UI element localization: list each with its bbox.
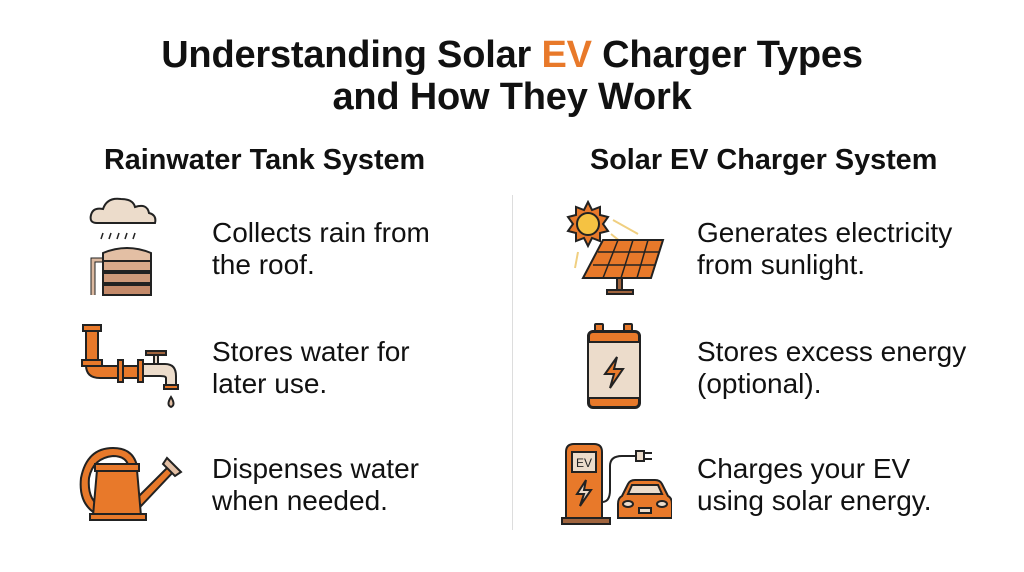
text: charges: Charges your EV [697,453,910,484]
text: collects: the roof. [212,249,315,280]
text: generates [697,217,952,280]
title [161,34,863,118]
icon: battery [587,323,641,409]
text: dispenses [212,453,419,516]
text: stores energy: (optional). [697,368,822,399]
title: Understanding Solar EV Charger Types [161,34,863,76]
text: generates: from sunlight. [697,249,865,280]
title: and How They Work [332,76,692,118]
icon: pipe tap [81,324,179,408]
text: stores water [212,336,410,399]
text: dispenses: when needed. [212,485,388,516]
icon: sun and panel [566,200,664,295]
text: stores water: later use. [212,368,327,399]
text: dispenses: Dispenses water [212,453,419,484]
text: collects [212,217,430,280]
icon: ev charger: EV [576,456,592,470]
icon: ev charger [561,443,672,525]
icon: rain tank [90,198,156,296]
text: charges [697,453,932,516]
text: stores energy: Stores excess energy [697,336,966,367]
text: generates: Generates electricity [697,217,952,248]
icon: watering can [80,447,182,521]
text: charges: using solar energy. [697,485,932,516]
heading: rainwater: Rainwater Tank System [104,144,425,176]
text: stores water: Stores water for [212,336,410,367]
text: collects: Collects rain from [212,217,430,248]
heading: solar: Solar EV Charger System [590,144,937,176]
divider [512,195,513,530]
text: stores energy [697,336,966,399]
